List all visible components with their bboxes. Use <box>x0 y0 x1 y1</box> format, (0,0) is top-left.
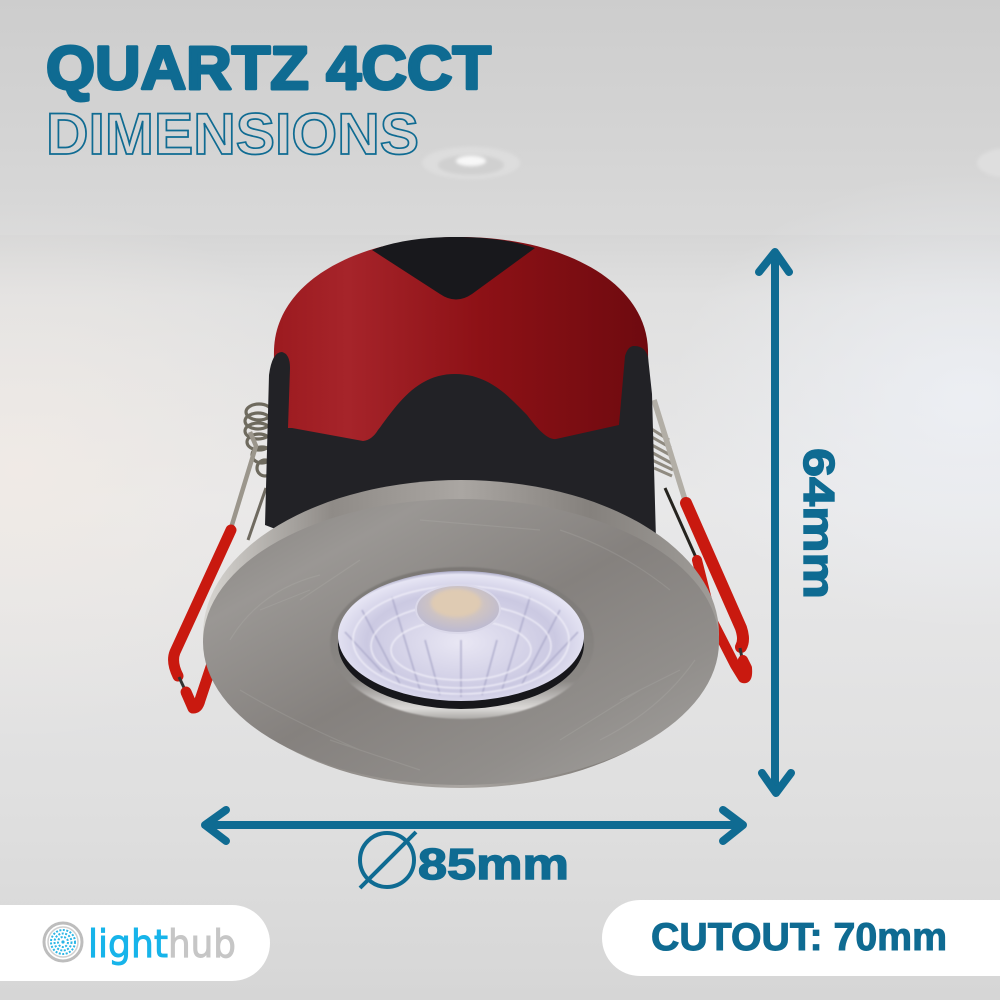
height arrow <box>759 252 791 793</box>
lens facets <box>345 586 578 697</box>
subtitle: DIMENSIONS <box>46 102 419 167</box>
logo pill <box>0 905 270 981</box>
ceiling downlight <box>422 147 520 179</box>
title: QUARTZ 4CCT <box>46 34 491 102</box>
icon: lighthub logo mark <box>44 923 82 961</box>
cutout label: CUTOUT: 70mm <box>651 916 947 959</box>
LED chip <box>431 589 481 617</box>
bezel rim <box>203 480 719 788</box>
height label: 64mm <box>794 448 843 599</box>
LED lens <box>338 571 584 701</box>
width arrow <box>205 810 743 841</box>
logo wordmark: light <box>88 922 168 966</box>
LED dome <box>416 585 500 633</box>
black heat sink body <box>265 346 656 600</box>
brushed sheen <box>230 520 695 770</box>
black wedge on hood <box>372 237 535 300</box>
lens surround <box>330 567 594 719</box>
red fire hood <box>272 237 650 520</box>
left spring clip <box>174 404 273 708</box>
diameter symbol <box>360 832 416 888</box>
right spring clip <box>650 400 747 678</box>
cutout pill <box>602 900 1000 976</box>
ceiling downlight, right edge <box>977 148 1000 178</box>
bezel face <box>203 499 719 785</box>
width label: 85mm <box>418 840 569 889</box>
logo wordmark: hub <box>168 922 236 966</box>
logo wordmark <box>88 922 236 966</box>
downlight product <box>174 237 747 788</box>
lens gap <box>338 579 584 709</box>
